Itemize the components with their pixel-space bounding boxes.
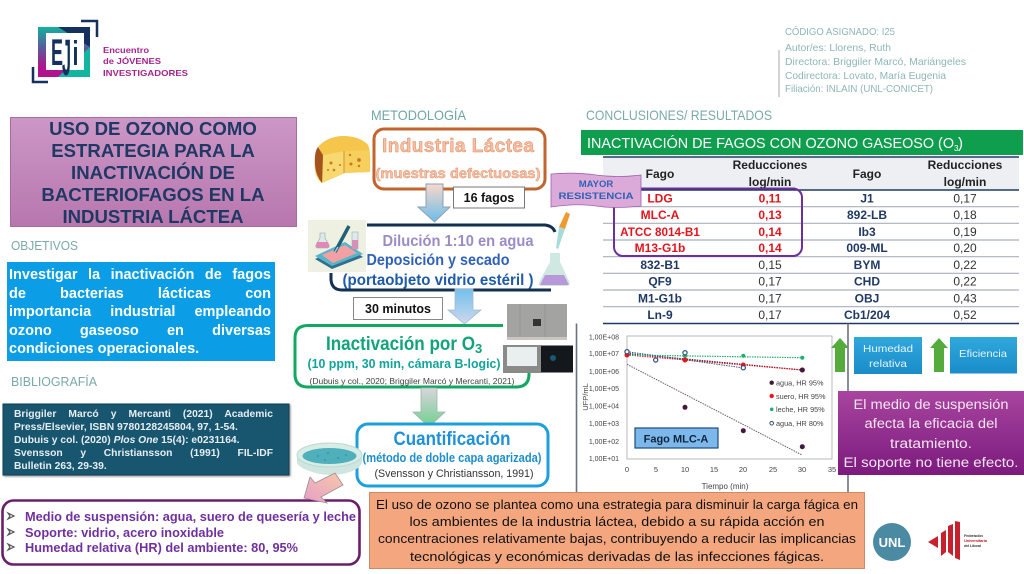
chart: UFP/mL vs tiempo, fago MLC-A: 5 xyxy=(654,465,658,474)
table: reducciones log/min por fago: 0,11 xyxy=(759,192,782,206)
text: objetivos xyxy=(9,267,271,357)
table: reducciones log/min por fago: CHD xyxy=(854,274,880,288)
panel: dilución y deposición: Deposición y secado xyxy=(366,252,510,269)
table: reducciones log/min por fago: QF9 xyxy=(648,274,672,288)
icon: cheese xyxy=(315,136,370,183)
panel: inactivación por O3: 3 xyxy=(475,341,482,356)
text: objetivos: ozono gaseoso en diversas xyxy=(9,323,271,339)
chart: UFP/mL vs tiempo, fago MLC-A: 1,00E+01 xyxy=(589,456,619,463)
callout: conclusión sobre medio y soporte xyxy=(838,391,1024,475)
table: reducciones log/min por fago: 0,14 xyxy=(758,241,782,255)
photo: cámara B-logic abierta xyxy=(503,345,573,373)
chart: UFP/mL vs tiempo, fago MLC-A: 1,00E+08 xyxy=(589,334,619,342)
chart: UFP/mL vs tiempo, fago MLC-A: 25 xyxy=(769,465,777,474)
table: reducciones log/min por fago: ATCC 8014-B1 xyxy=(620,226,700,239)
text: objetivos: Investigar la inactivación de fagos xyxy=(9,267,271,283)
logo: Federación Universitaria del Litoral xyxy=(928,521,988,560)
table: reducciones log/min por fago: OBJ xyxy=(855,292,879,306)
table: reducciones log/min por fago: Ln-9 xyxy=(647,308,673,322)
panel: inactivación por O3 xyxy=(295,326,529,387)
heading: conclusiones y resultados: CONCLUSIONES/ RESULTADOS xyxy=(586,107,772,123)
title panel xyxy=(10,118,296,227)
label: 30 minutos: 30 minutos xyxy=(365,302,431,316)
table: reducciones log/min por fago: 832-B1 xyxy=(640,258,680,272)
logo: Encuentro de Jóvenes Investigadores xyxy=(33,21,188,86)
author information: Directora: Briggiler Marcó, Mariángeles xyxy=(785,56,966,68)
panel: texto de conclusión: El uso de ozono se plantea como una estrategia para disminuir la carga fágica en xyxy=(376,497,858,512)
banner: inactivación de fagos: 3 xyxy=(954,144,959,153)
chart: UFP/mL vs tiempo, fago MLC-A: 1,00E+02 xyxy=(589,439,619,446)
panel: variables del ensayo xyxy=(2,500,360,564)
chart: UFP/mL vs tiempo, fago MLC-A: Tiempo (min) xyxy=(702,482,749,491)
table: reducciones log/min por fago: Fago xyxy=(853,167,881,181)
heading: metodología: METODOLOGÍA xyxy=(371,107,467,123)
panel: texto de conclusión xyxy=(370,492,864,568)
arrow: industria a dilución xyxy=(418,184,450,222)
author information xyxy=(778,25,966,97)
panel: dilución y deposición: (portaobjeto vidrio estéril ) xyxy=(342,272,534,289)
label: 30 minutos xyxy=(354,298,442,320)
table: reducciones log/min por fago: 0,15 xyxy=(758,258,782,272)
panel: dilución y deposición xyxy=(331,225,555,290)
logo: Federación Universitaria del Litoral: Universitaria xyxy=(964,538,988,543)
title panel: USO DE OZONO COMO xyxy=(49,118,257,139)
panel: variables del ensayo: Soporte: vidrio, acero inoxidable xyxy=(25,525,224,540)
table: reducciones log/min por fago: 0,17 xyxy=(953,192,977,206)
chart: UFP/mL vs tiempo, fago MLC-A: 1,00E+03 xyxy=(589,421,619,428)
box: humedad relativa xyxy=(854,337,922,374)
logo: UNL xyxy=(873,523,911,561)
heading: objetivos: OBJETIVOS xyxy=(11,238,78,253)
callout: mayor resistencia xyxy=(551,173,641,208)
text: objetivos: de bacterias lácticas con xyxy=(9,286,271,302)
table: reducciones log/min por fago: 0,17 xyxy=(758,292,782,306)
logo: Encuentro de Jóvenes Investigadores: de JÓVENES xyxy=(103,55,161,66)
text: bibliografía: Dubuis y col. (2020) Plos One 15(4): e0231164. xyxy=(14,435,240,446)
table: reducciones log/min por fago: 892-LB xyxy=(847,208,887,222)
chart: UFP/mL vs tiempo, fago MLC-A xyxy=(576,324,848,492)
chart: UFP/mL vs tiempo, fago MLC-A: UFP/mL xyxy=(581,383,590,411)
callout: mayor resistencia: MAYOR xyxy=(579,179,613,190)
table: reducciones log/min por fago: 0,18 xyxy=(953,208,977,222)
chart: UFP/mL vs tiempo, fago MLC-A: 0 xyxy=(625,465,629,474)
panel: variables del ensayo: Medio de suspensión: agua, suero de quesería y leche xyxy=(25,509,356,524)
logo: Encuentro de Jóvenes Investigadores: J xyxy=(62,29,71,86)
table: reducciones log/min por fago: log/min xyxy=(749,175,791,189)
arrow: aumento de humedad xyxy=(831,338,849,372)
table: reducciones log/min por fago: Ib3 xyxy=(858,225,876,239)
callout: conclusión sobre medio y soporte: afecta la eficacia del xyxy=(864,416,998,431)
text: bibliografía: Briggiler Marcó y Mercanti (2021) Academic xyxy=(14,409,273,420)
chart: UFP/mL vs tiempo, fago MLC-A: 15 xyxy=(710,465,718,474)
chart: UFP/mL vs tiempo, fago MLC-A: 1,00E+05 xyxy=(589,386,619,393)
callout: conclusión sobre medio y soporte: tratamiento. xyxy=(890,436,972,451)
table: reducciones log/min por fago: 0,22 xyxy=(953,258,977,272)
table: reducciones log/min por fago: 0,19 xyxy=(953,225,977,239)
heading: bibliografía: BIBLIOGRAFÍA xyxy=(11,374,97,389)
panel: cuantificación: Cuantificación xyxy=(394,429,510,450)
arrow: aumento de eficiencia xyxy=(930,338,948,372)
table: reducciones log/min por fago: LDG xyxy=(647,192,673,206)
chart: UFP/mL vs tiempo, fago MLC-A: 35 xyxy=(828,465,836,474)
table: reducciones log/min por fago: 009-ML xyxy=(846,241,888,255)
table: reducciones log/min por fago: 0,52 xyxy=(953,308,977,322)
text: bibliografía xyxy=(14,409,273,472)
text: objetivos: importancia industrial empleando xyxy=(9,304,271,320)
panel: variables del ensayo: Humedad relativa (HR) del ambiente: 80, 95% xyxy=(25,540,298,555)
chart: UFP/mL vs tiempo, fago MLC-A: agua, HR 80% xyxy=(776,419,824,428)
panel: industria láctea: (muestras defectuosas) xyxy=(376,166,540,181)
panel: dilución y deposición: Dilución 1:10 en agua xyxy=(382,233,534,250)
chart: UFP/mL vs tiempo, fago MLC-A: 1,00E+04 xyxy=(589,404,619,410)
box: humedad relativa: relativa xyxy=(869,358,907,370)
highlight: fagos de mayor resistencia xyxy=(614,188,802,256)
chart: UFP/mL vs tiempo, fago MLC-A: Fago MLC-A xyxy=(644,434,708,446)
text: bibliografía: Press/Elsevier, ISBN 9780128245804, 97, 1-54. xyxy=(14,422,238,433)
table: reducciones log/min por fago: MLC-A xyxy=(641,208,680,222)
author information: Autor/es: Llorens, Ruth xyxy=(785,42,891,54)
panel: inactivación por O3: Inactivación por O xyxy=(326,333,475,355)
title panel: ESTRATEGIA PARA LA xyxy=(51,140,255,161)
logo: Encuentro de Jóvenes Investigadores: INVESTIGADORES xyxy=(103,68,188,78)
table: reducciones log/min por fago: log/min xyxy=(944,175,986,189)
logo: Encuentro de Jóvenes Investigadores: i xyxy=(72,35,78,73)
table: reducciones log/min por fago: 0,17 xyxy=(758,308,782,322)
logo: Federación Universitaria del Litoral: Federación xyxy=(964,533,984,538)
logo: Federación Universitaria del Litoral: del Litoral xyxy=(964,543,981,548)
banner: inactivación de fagos: ) xyxy=(958,135,963,152)
chart: UFP/mL vs tiempo, fago MLC-A: 20 xyxy=(739,465,747,474)
table: reducciones log/min por fago: M1-G1b xyxy=(638,292,682,306)
chart: UFP/mL vs tiempo, fago MLC-A: agua, HR 95% xyxy=(776,378,824,388)
text: bibliografía: Bulletin 263, 29-39. xyxy=(14,461,107,472)
panel: bibliografía background xyxy=(3,404,289,475)
logo: UNL: UNL xyxy=(879,535,905,550)
panel: objetivos background xyxy=(7,262,275,361)
table: reducciones log/min por fago: Fago xyxy=(646,167,674,181)
table: reducciones log/min por fago: 0,14 xyxy=(758,225,782,239)
label: 16 fagos xyxy=(454,187,524,208)
photo: cámara B-logic cerrada xyxy=(507,304,567,340)
callout: mayor resistencia: RESISTENCIA xyxy=(558,191,634,202)
text: objetivos: condiciones operacionales. xyxy=(9,341,199,357)
panel: inactivación por O3: (10 ppm, 30 min, cámara B-logic) xyxy=(308,356,500,371)
logo: Encuentro de Jóvenes Investigadores: E xyxy=(51,32,63,73)
table: reducciones log/min por fago: M13-G1b xyxy=(635,241,685,255)
callout: conclusión sobre medio y soporte: El soporte no tiene efecto. xyxy=(844,455,1018,470)
table: reducciones log/min por fago: J1 xyxy=(860,192,874,206)
banner: inactivación de fagos: INACTIVACIÓN DE FAGOS CON OZONO GASEOSO (O xyxy=(587,135,954,152)
table: reducciones log/min por fago: Reducciones xyxy=(928,158,1003,172)
banner: inactivación de fagos xyxy=(581,130,1023,155)
chart: UFP/mL vs tiempo, fago MLC-A: leche, HR 95% xyxy=(776,405,825,414)
table: reducciones log/min por fago: 0,17 xyxy=(758,274,782,288)
table: reducciones log/min por fago: Cb1/204 xyxy=(844,308,890,322)
box: humedad relativa: Humedad xyxy=(863,343,913,355)
table: reducciones log/min por fago: 0,22 xyxy=(953,274,977,288)
author information: Filiación: INLAIN (UNL-CONICET) xyxy=(785,83,933,95)
panel: cuantificación: (método de doble capa agarizada) xyxy=(362,451,542,465)
table: reducciones log/min por fago: 0,43 xyxy=(953,292,977,306)
chart: UFP/mL vs tiempo, fago MLC-A: suero, HR 95% xyxy=(776,392,826,401)
author information: Codirectora: Lovato, María Eugenia xyxy=(785,70,946,82)
panel: inactivación por O3: (Dubuis y col., 2020; Briggiler Marcó y Mercanti, 2021) xyxy=(310,377,515,386)
panel: industria láctea xyxy=(374,129,545,189)
label: 16 fagos: 16 fagos xyxy=(464,191,514,205)
logo: Encuentro de Jóvenes Investigadores: Encuentro xyxy=(103,45,149,55)
panel: texto de conclusión: concentraciones relativamente bajas, contribuyendo a reducir las implicancias xyxy=(378,531,857,546)
arrow: inactivación a cuantificación xyxy=(413,388,445,427)
table: reducciones log/min por fago: 0,20 xyxy=(953,241,977,255)
panel: cuantificación xyxy=(357,424,548,486)
panel: texto de conclusión: tecnológicas y económicas derivadas de las infecciones fágicas. xyxy=(410,549,824,564)
table: reducciones log/min por fago: 0,13 xyxy=(758,208,782,222)
panel: industria láctea: Industria Láctea xyxy=(382,136,534,157)
title panel: INDUSTRIA LÁCTEA xyxy=(62,206,244,227)
icon: lab scene xyxy=(308,220,366,272)
chart: UFP/mL vs tiempo, fago MLC-A: 1,00E+07 xyxy=(589,351,619,358)
chart: UFP/mL vs tiempo, fago MLC-A: 1,00E+06 xyxy=(589,369,619,376)
table: reducciones log/min por fago: BYM xyxy=(854,258,880,272)
chart: UFP/mL vs tiempo, fago MLC-A: 30 xyxy=(798,465,806,474)
callout: conclusión sobre medio y soporte: El medio de suspensión xyxy=(854,397,1008,412)
icon: dropper and flask xyxy=(539,212,570,286)
author information: CÓDIGO ASIGNADO: I25 xyxy=(785,25,895,38)
text: bibliografía: Svensson y Christiansson (1991) FIL-IDF xyxy=(14,448,273,459)
title panel: BACTERIOFAGOS EN LA xyxy=(41,184,265,205)
box: eficiencia: Eficiencia xyxy=(959,348,1007,360)
panel: texto de conclusión: los ambientes de la industria láctea, debido a su rápida acción en xyxy=(410,514,824,529)
table: reducciones log/min por fago: Reducciones xyxy=(733,158,808,172)
chart: UFP/mL vs tiempo, fago MLC-A: 10 xyxy=(681,465,689,474)
arrow: cuantificación a variables xyxy=(304,473,343,503)
table: reducciones log/min por fago xyxy=(603,157,1019,324)
box: eficiencia xyxy=(950,337,1017,374)
title panel: INACTIVACIÓN DE xyxy=(71,162,235,183)
arrow: dilución a inactivación xyxy=(448,289,481,324)
panel: cuantificación: (Svensson y Christiansson, 1991) xyxy=(374,468,534,480)
icon: petri dish xyxy=(297,443,362,475)
